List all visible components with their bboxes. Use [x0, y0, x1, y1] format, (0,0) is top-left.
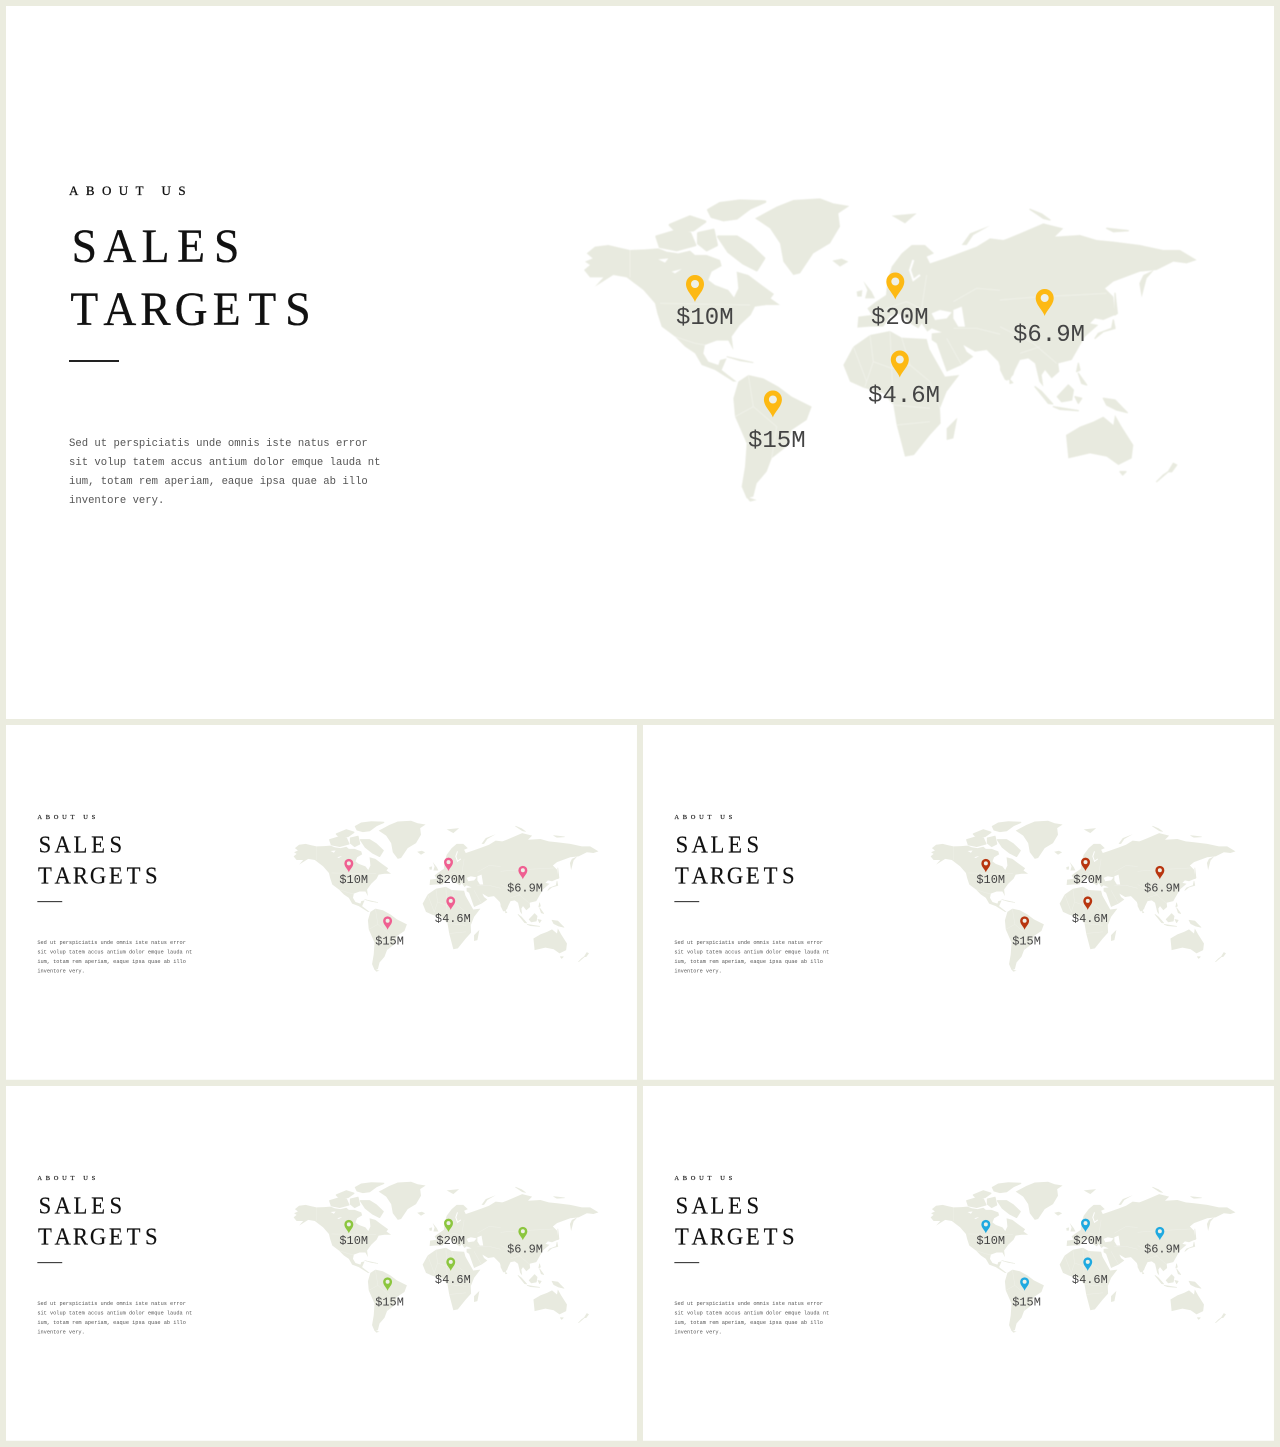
title: SALES [72, 220, 239, 273]
body text [674, 1301, 829, 1335]
title [70, 220, 311, 336]
value labels: $20M [1073, 1234, 1102, 1248]
body text: ium, totam rem aperiam, eaque ipsa quae ab illo [674, 1320, 823, 1326]
world map [931, 1182, 1235, 1333]
value labels: $6.9M [1144, 882, 1180, 896]
panel: main slide, yellow [6, 6, 1274, 719]
value labels: $4.6M [1072, 912, 1108, 926]
value labels: $4.6M [1072, 1273, 1108, 1287]
title: SALES [676, 1193, 759, 1220]
value labels: $10M [339, 1234, 368, 1248]
value labels [339, 873, 543, 948]
world map [294, 821, 598, 972]
body text: ium, totam rem aperiam, eaque ipsa quae ab illo [37, 1320, 186, 1326]
value labels: $10M [976, 873, 1005, 887]
body text: inventore very. [674, 968, 722, 974]
body text: ium, totam rem aperiam, eaque ipsa quae ab illo [674, 959, 823, 965]
value labels: $6.9M [1144, 1243, 1180, 1257]
pins [981, 858, 1164, 930]
value labels: $6.9M [507, 1243, 543, 1257]
body text [37, 1301, 192, 1335]
value labels [339, 1234, 543, 1309]
value labels: $20M [436, 1234, 465, 1248]
body text: inventore very. [674, 1329, 722, 1335]
pin: Asia [1036, 289, 1054, 316]
world map [294, 1182, 598, 1333]
title: SALES [676, 832, 759, 859]
value labels: $15M [375, 1295, 404, 1309]
value labels: $20M [1073, 873, 1102, 887]
eyebrow: ABOUT US [37, 1175, 99, 1182]
title: TARGETS [38, 863, 158, 890]
pin: South America [764, 390, 782, 418]
eyebrow: ABOUT US [674, 814, 736, 821]
title rule [69, 360, 119, 362]
title rule [37, 900, 62, 903]
body text: inventore very. [37, 968, 85, 974]
panel: small slide, red [643, 725, 1274, 1080]
body text: ium, totam rem aperiam, eaque ipsa quae ab illo [69, 476, 368, 488]
body text [37, 940, 192, 974]
value labels [976, 1234, 1180, 1309]
value labels: $20M [871, 305, 929, 332]
title [38, 832, 158, 890]
value labels: $10M [339, 873, 368, 887]
world map [584, 198, 1197, 502]
body text [69, 438, 381, 507]
world map [931, 821, 1235, 972]
value labels: $15M [1012, 934, 1041, 948]
title: TARGETS [675, 863, 795, 890]
value labels: $4.6M [868, 383, 940, 410]
body text: Sed ut perspiciatis unde omnis iste natus error [674, 940, 823, 946]
body text [674, 940, 829, 974]
pin: North America [686, 275, 704, 302]
value labels: $10M [676, 305, 734, 332]
title [675, 832, 795, 890]
body text: sit volup tatem accus antium dolor emque lauda nt [37, 949, 192, 955]
title: SALES [39, 832, 122, 859]
body text: sit volup tatem accus antium dolor emque lauda nt [674, 949, 829, 955]
value labels: $15M [375, 934, 404, 948]
body text: Sed ut perspiciatis unde omnis iste natus error [674, 1301, 823, 1307]
title: TARGETS [70, 283, 311, 336]
pin: Europe [886, 272, 904, 300]
body text: Sed ut perspiciatis unde omnis iste natus error [69, 438, 368, 450]
title [675, 1193, 795, 1251]
eyebrow: ABOUT US [37, 814, 99, 821]
value labels: $6.9M [1013, 322, 1085, 349]
value labels: $4.6M [435, 1273, 471, 1287]
value labels [976, 873, 1180, 948]
panel: small slide, blue [643, 1086, 1274, 1441]
body text: sit volup tatem accus antium dolor emque lauda nt [37, 1310, 192, 1316]
panel: small slide, pink [6, 725, 637, 1080]
body text: sit volup tatem accus antium dolor emque lauda nt [69, 457, 381, 469]
body text: Sed ut perspiciatis unde omnis iste natus error [37, 940, 186, 946]
pins [344, 858, 527, 930]
title rule [674, 900, 699, 903]
value labels: $4.6M [435, 912, 471, 926]
body text: ium, totam rem aperiam, eaque ipsa quae ab illo [37, 959, 186, 965]
pins [981, 1219, 1164, 1291]
value labels: $10M [976, 1234, 1005, 1248]
eyebrow: ABOUT US [69, 183, 193, 198]
value labels [676, 305, 1085, 455]
title: TARGETS [38, 1224, 158, 1251]
panel: small slide, green [6, 1086, 637, 1441]
body text: inventore very. [37, 1329, 85, 1335]
pin: Africa [891, 350, 909, 378]
value labels: $6.9M [507, 882, 543, 896]
title rule [37, 1261, 62, 1264]
title rule [674, 1261, 699, 1264]
pins [344, 1219, 527, 1291]
body text: sit volup tatem accus antium dolor emque lauda nt [674, 1310, 829, 1316]
body text: inventore very. [69, 495, 164, 507]
title [38, 1193, 158, 1251]
value labels: $15M [748, 428, 806, 455]
body text: Sed ut perspiciatis unde omnis iste natus error [37, 1301, 186, 1307]
value labels: $15M [1012, 1295, 1041, 1309]
value labels: $20M [436, 873, 465, 887]
title: TARGETS [675, 1224, 795, 1251]
eyebrow: ABOUT US [674, 1175, 736, 1182]
title: SALES [39, 1193, 122, 1220]
